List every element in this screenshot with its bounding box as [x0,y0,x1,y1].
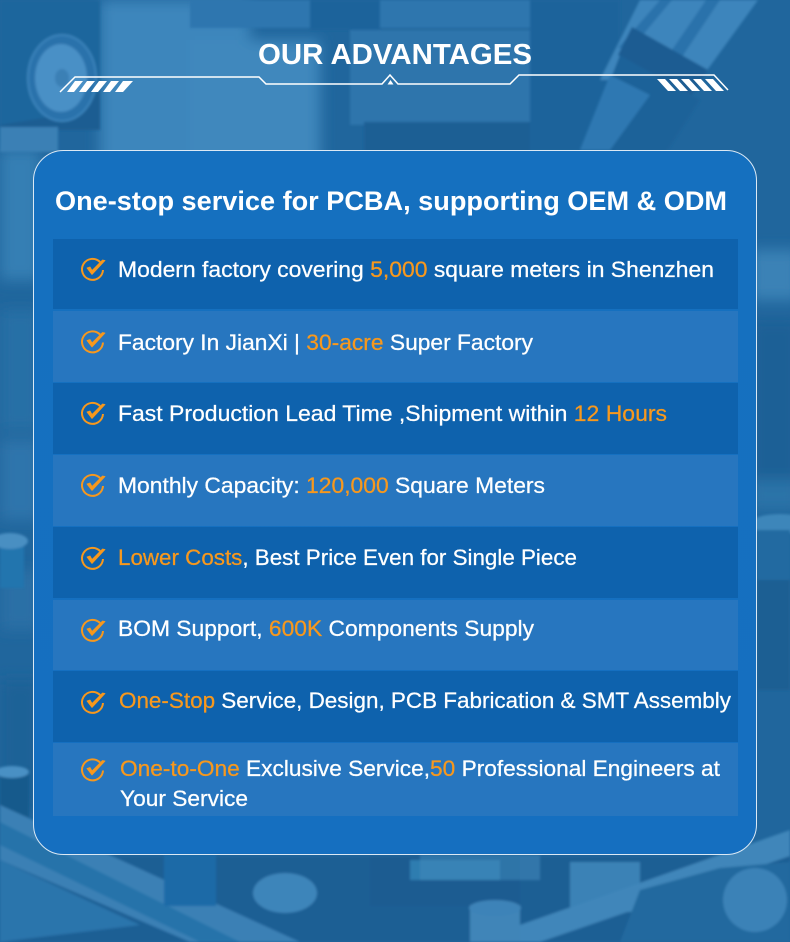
row 2 [53,311,738,382]
row 6: BOM Support, 600K Components Supply [118,616,534,641]
panel: advantages card [34,150,756,854]
row 7: One-Stop Service, Design, PCB Fabrication & SMT Assembly [119,688,731,713]
row 8 [53,743,738,816]
row 1 [53,239,738,309]
title ornament line [60,75,728,92]
row 3: Fast Production Lead Time ,Shipment within 12 Hours [118,401,667,426]
row 8: Your Service [120,786,248,811]
row 4: Monthly Capacity: 120,000 Square Meters [118,473,545,498]
row 8: One-to-One Exclusive Service, 50 Professional Engineers at [120,756,720,781]
row 3 [53,383,738,454]
row 1: Modern factory covering 5,000 square meters in Shenzhen [118,257,714,282]
row 5: Lower Costs, Best Price Even for Single Piece [118,545,577,570]
panel heading: One-stop service for PCBA, supporting OEM & ODM [55,186,727,216]
row 6 [53,600,738,670]
row 5 [53,527,738,598]
title: OUR ADVANTAGES: OUR ADVANTAGES [258,39,532,71]
row 7 [53,671,738,742]
row 4 [53,455,738,526]
row 2: Factory In JianXi | 30-acre Super Factory [118,330,533,355]
